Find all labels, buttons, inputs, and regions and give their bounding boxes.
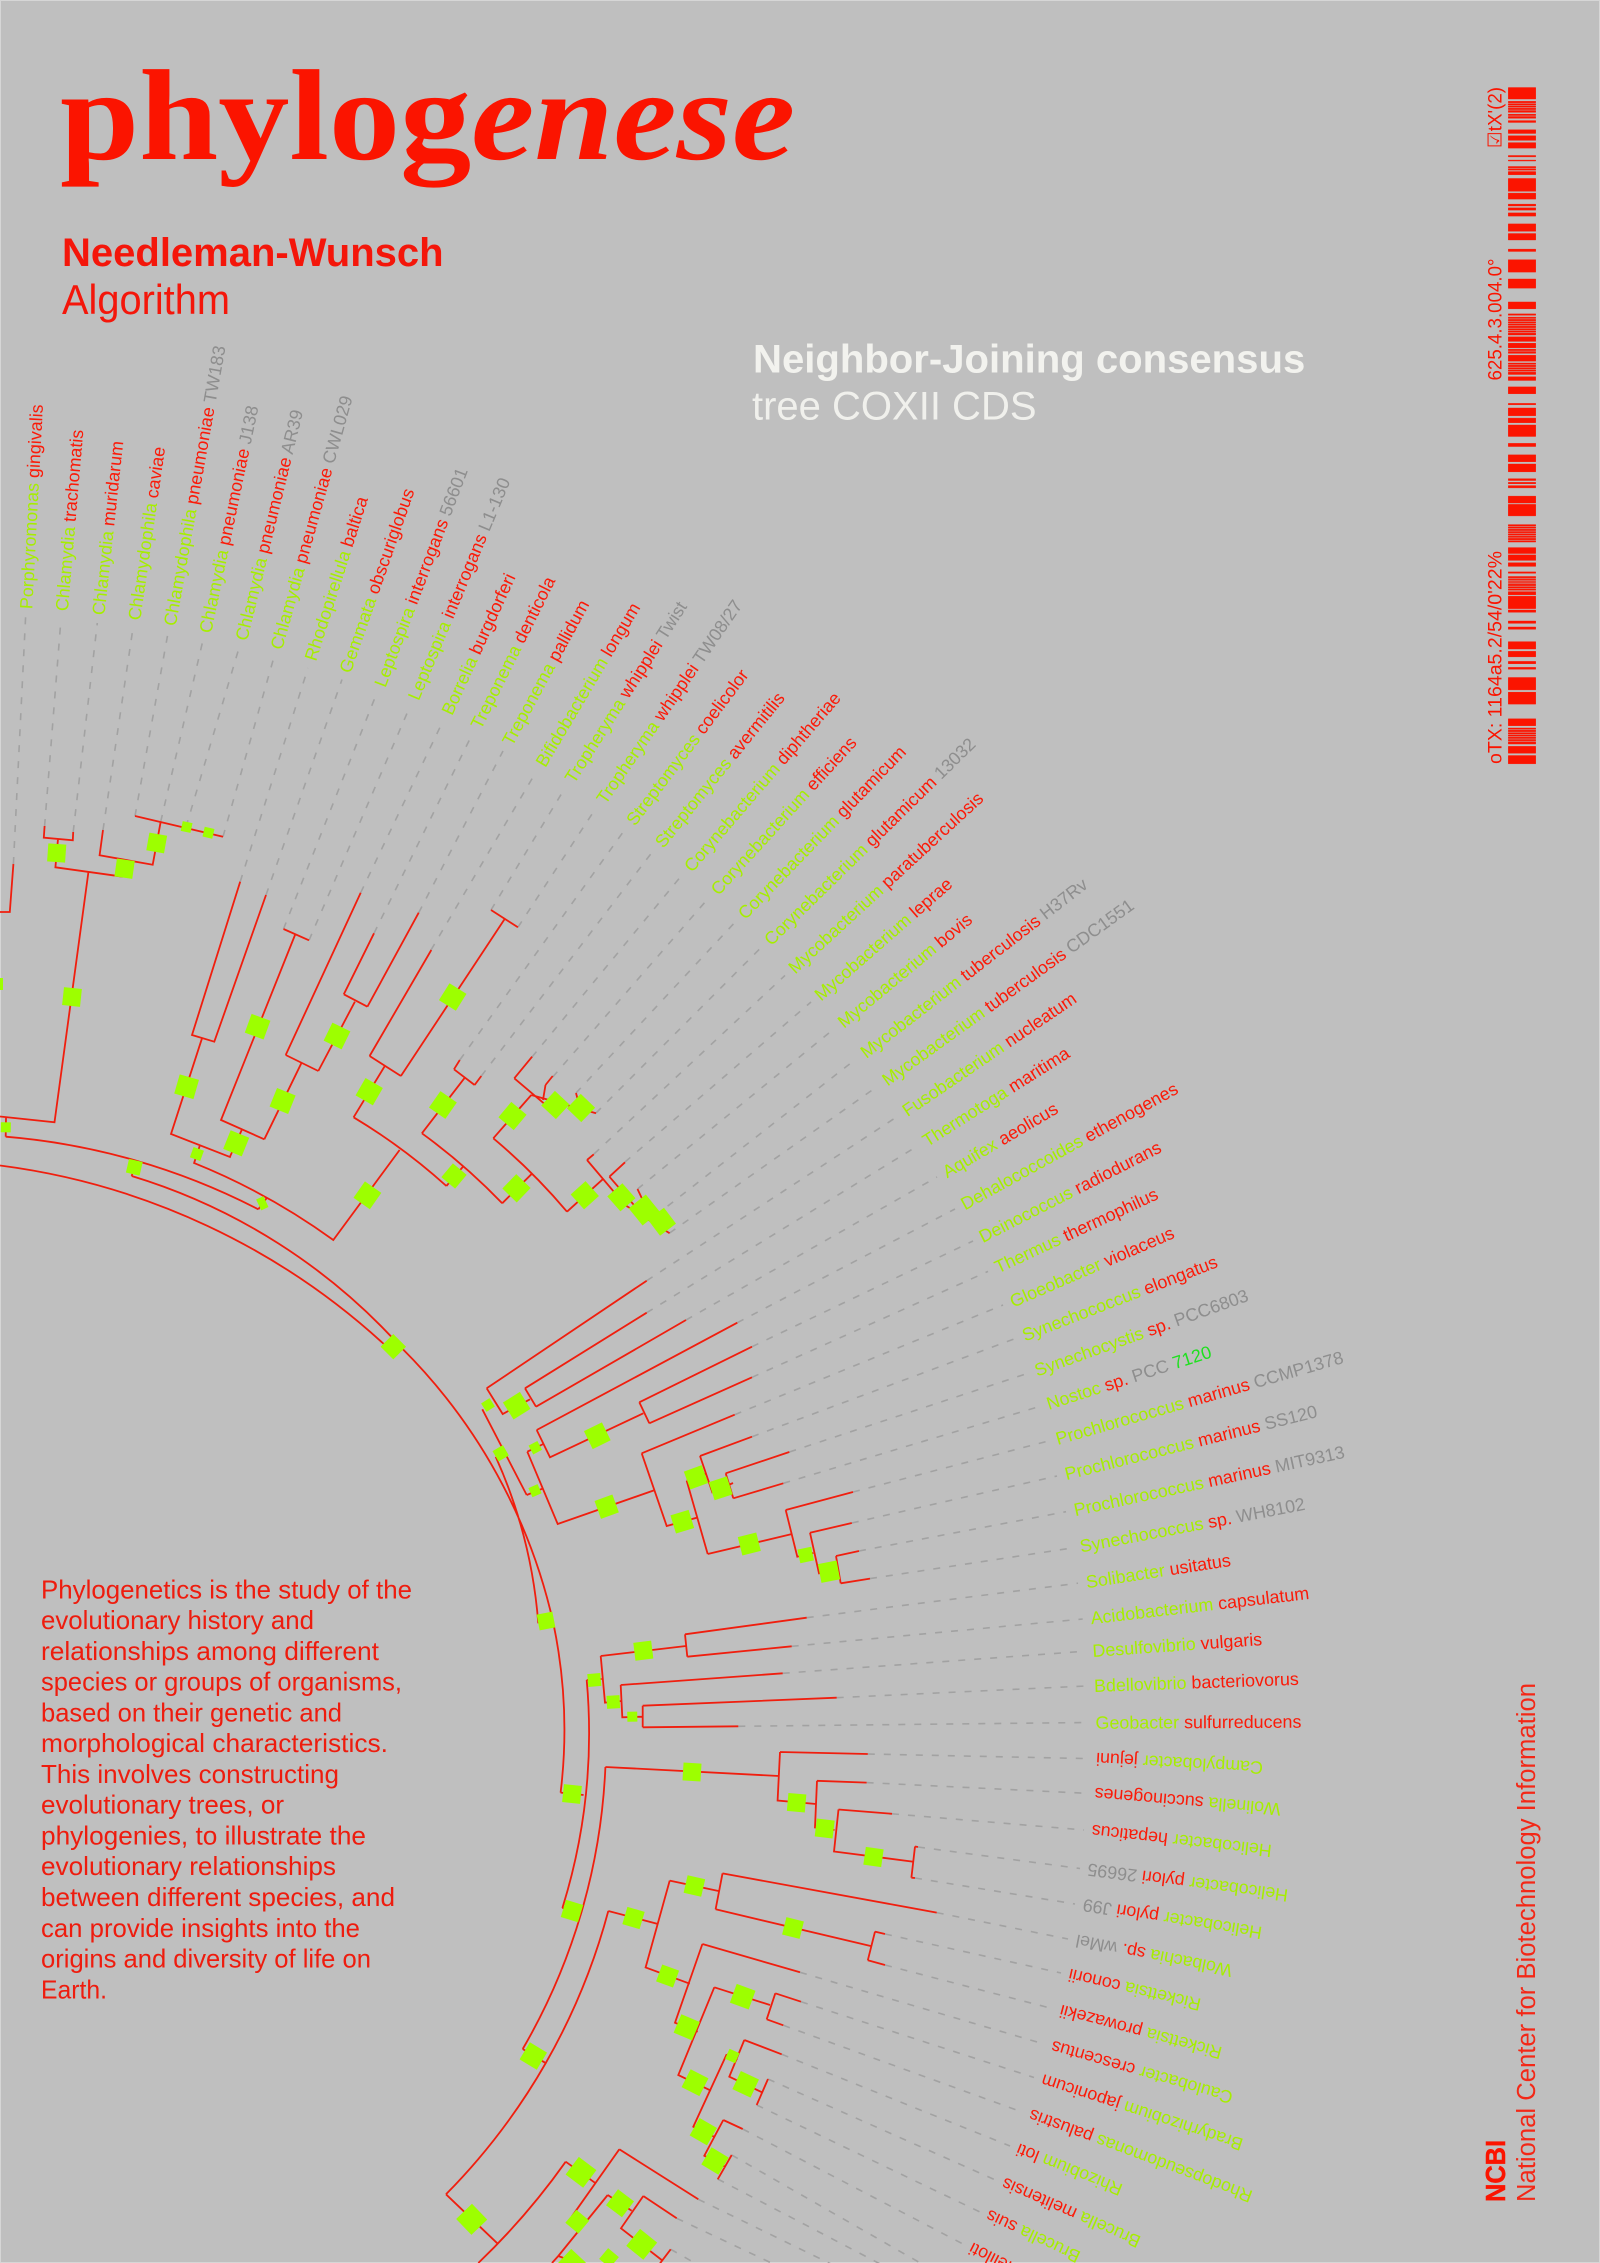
barcode stripes (1508, 88, 1536, 764)
label: Prochlorococcus marinus MIT9313: Prochlorococcus marinus MIT9313 (1072, 1442, 1346, 1520)
label: Bifidobacterium longum: Bifidobacterium longum (532, 599, 644, 770)
species labels (16, 344, 1346, 2263)
body text paragraph (41, 1574, 412, 2004)
NCBI full name: National Center for Biotechnology Information (1513, 1683, 1541, 2202)
heading: Neighbor-Joining consensus: Neighbor-Joining consensus (753, 338, 1305, 382)
label: Rhodopseudomonas palustris: Rhodopseudomonas palustris (1026, 2105, 1255, 2206)
body text paragraph: based on their genetic and (41, 1697, 342, 1727)
label: Corynebacterium glutamicum 13032: Corynebacterium glutamicum 13032 (760, 734, 980, 949)
label: Chlamydophila caviae: Chlamydophila caviae (124, 445, 169, 621)
label: Mycobacterium bovis: Mycobacterium bovis (834, 909, 976, 1032)
body text paragraph: evolutionary history and (41, 1605, 314, 1635)
barcode caption bottom: oTX: 1164a5.2/54/0'22% (1486, 551, 1507, 764)
label: Nostoc sp. PCC 7120: Nostoc sp. PCC 7120 (1044, 1342, 1214, 1414)
body text paragraph: phylogenies, to illustrate the (41, 1820, 366, 1850)
label: Mycobacterium tuberculosis CDC1551: Mycobacterium tuberculosis CDC1551 (878, 895, 1138, 1090)
label: Thermus thermophilus: Thermus thermophilus (991, 1184, 1161, 1277)
label: Thermotoga maritima: Thermotoga maritima (919, 1043, 1073, 1151)
clade: Thermotogae to Cyanobacteria (482, 1281, 870, 1583)
label: Helicobacter pylori J99: Helicobacter pylori J99 (1081, 1895, 1263, 1943)
clade: Acidobacteria and Deltaproteobacteria (587, 1618, 837, 1727)
label: Mycobacterium leprae: Mycobacterium leprae (811, 874, 956, 1005)
label: Acidobacterium capsulatum: Acidobacterium capsulatum (1089, 1583, 1310, 1628)
label: Gemmata obscuriglobus: Gemmata obscuriglobus (335, 486, 418, 675)
label: Dehalococcoides ethenogenes: Dehalococcoides ethenogenes (957, 1079, 1181, 1214)
label: Chlamydophila pneumoniae TW183: Chlamydophila pneumoniae TW183 (160, 344, 230, 627)
body text paragraph: can provide insights into the (41, 1913, 360, 1943)
label: Synechococcus elongatus: Synechococcus elongatus (1019, 1252, 1220, 1345)
label: Corynebacterium glutamicum: Corynebacterium glutamicum (734, 742, 910, 923)
clade: Alphaproteobacteria (562, 1873, 937, 2179)
clade: Epsilonproteobacteria (561, 1752, 918, 1878)
label: Prochlorococcus marinus SS120: Prochlorococcus marinus SS120 (1063, 1401, 1319, 1484)
label: Prochlorococcus marinus CCMP1378: Prochlorococcus marinus CCMP1378 (1053, 1347, 1346, 1449)
body text paragraph: This involves constructing (41, 1759, 339, 1789)
label: Tropheryma whipplei Twist: Tropheryma whipplei Twist (561, 598, 691, 787)
label: Wolinella succinogenes: Wolinella succinogenes (1094, 1784, 1281, 1819)
clade: lower branches (446, 2049, 698, 2263)
body text paragraph: morphological characteristics. (41, 1728, 388, 1758)
label: Rickettsia prowazekii: Rickettsia prowazekii (1057, 2001, 1224, 2063)
label: Brucella melitensis: Brucella melitensis (999, 2174, 1144, 2252)
clade: Planctomycetes to Spirochaetes (171, 882, 419, 1163)
label: Helicobacter hepaticus: Helicobacter hepaticus (1090, 1821, 1273, 1861)
body text paragraph: Earth. (41, 1974, 107, 2004)
heading: Needleman-Wunsch: Needleman-Wunsch (62, 231, 444, 275)
label: Treponema pallidum: Treponema pallidum (498, 597, 593, 749)
clade: Actinobacteria (354, 910, 670, 1233)
label: Geobacter sulfurreducens: Geobacter sulfurreducens (1095, 1712, 1301, 1733)
label: Bdellovibrio bacteriovorus: Bdellovibrio bacteriovorus (1094, 1669, 1299, 1696)
body text paragraph: evolutionary trees, or (41, 1790, 284, 1820)
body text paragraph: relationships among different (41, 1636, 380, 1666)
NCBI wordmark: NCBI (1480, 2140, 1511, 2202)
label: Corynebacterium diphtheriae: Corynebacterium diphtheriae (680, 688, 845, 876)
label: Leptospira interrogans 56601: Leptospira interrogans 56601 (370, 465, 472, 690)
subheading: Algorithm: Algorithm (62, 276, 230, 323)
label: Chlamydia pneumoniae CWL029: Chlamydia pneumoniae CWL029 (267, 393, 357, 652)
body text paragraph: species or groups of organisms, (41, 1667, 402, 1697)
label: Chlamydia trachomatis: Chlamydia trachomatis (52, 429, 87, 612)
body text paragraph: Phylogenetics is the study of the (41, 1574, 412, 1604)
barcode (1486, 87, 1536, 764)
label: Rhodopirellula baltica: Rhodopirellula baltica (301, 494, 372, 663)
label: Campylobacter jejuni: Campylobacter jejuni (1095, 1749, 1263, 1778)
label: Streptomyces coelicolor: Streptomyces coelicolor (622, 665, 753, 829)
label: Rhizobium loti: Rhizobium loti (1013, 2139, 1125, 2200)
label: Chlamydia pneumoniae AR39: Chlamydia pneumoniae AR39 (232, 408, 307, 642)
label: Bradyrhizobium japonicum: Bradyrhizobium japonicum (1039, 2070, 1245, 2154)
label: Deinococcus radiodurans: Deinococcus radiodurans (976, 1137, 1165, 1247)
subheading: tree COXII CDS: tree COXII CDS (752, 384, 1037, 428)
label: Desulfovibrio vulgaris: Desulfovibrio vulgaris (1092, 1629, 1263, 1661)
tree nodes (0, 821, 884, 2263)
label: Chlamydia muridarum: Chlamydia muridarum (89, 440, 127, 616)
body text paragraph: origins and diversity of life on (41, 1944, 371, 1974)
barcode caption middle: 625.4.3.004.0° (1486, 258, 1507, 380)
label: Streptomyces avermitilis: Streptomyces avermitilis (651, 688, 789, 851)
label: Mycobacterium paratuberculosis: Mycobacterium paratuberculosis (784, 788, 987, 978)
label: Aquifex aeolicus: Aquifex aeolicus (939, 1098, 1062, 1182)
label: Mycobacterium tuberculosis H37Rv: Mycobacterium tuberculosis H37Rv (857, 874, 1091, 1062)
barcode caption top: ☑tX'(2) (1486, 87, 1507, 148)
main arcs (0, 1137, 608, 2263)
body text paragraph: evolutionary relationships (41, 1851, 336, 1881)
label: Wolbachia sp. wMel: Wolbachia sp. wMel (1074, 1931, 1234, 1981)
body text paragraph: between different species, and (41, 1882, 395, 1912)
label: Solibacter usitatus: Solibacter usitatus (1085, 1550, 1232, 1592)
leader lines (13, 617, 1088, 2263)
label: Gloeobacter violaceus: Gloeobacter violaceus (1007, 1223, 1177, 1311)
label: Chlamydia pneumoniae J138: Chlamydia pneumoniae J138 (195, 404, 262, 635)
label: Caulobacter crescentus: Caulobacter crescentus (1049, 2037, 1235, 2108)
label: Porphyromonas gingivalis: Porphyromonas gingivalis (16, 404, 47, 610)
label: Helicobacter pylori 26695: Helicobacter pylori 26695 (1086, 1859, 1289, 1906)
title: phylogenese (60, 45, 795, 188)
label: Tropheryma whipplei TW08/27: Tropheryma whipplei TW08/27 (592, 596, 746, 808)
label: Borrelia burgdorferi: Borrelia burgdorferi (438, 570, 519, 718)
label: Rickettsia conorii: Rickettsia conorii (1067, 1965, 1203, 2015)
footer: NCBI (1480, 1683, 1541, 2202)
clade: Bacteroidetes and Chlamydiae (0, 816, 223, 1137)
label: Treponema denticola: Treponema denticola (467, 573, 559, 732)
label: Corynebacterium efficiens: Corynebacterium efficiens (707, 733, 861, 899)
tree branches (0, 816, 937, 2263)
label: Leptospira interrogans L1-130: Leptospira interrogans L1-130 (404, 475, 514, 703)
label: Synechococcus sp. WH8102: Synechococcus sp. WH8102 (1078, 1494, 1307, 1556)
label: Synechocystis sp. PCC6803: Synechocystis sp. PCC6803 (1032, 1285, 1251, 1380)
label: Fusobacterium nucleatum: Fusobacterium nucleatum (899, 988, 1080, 1120)
